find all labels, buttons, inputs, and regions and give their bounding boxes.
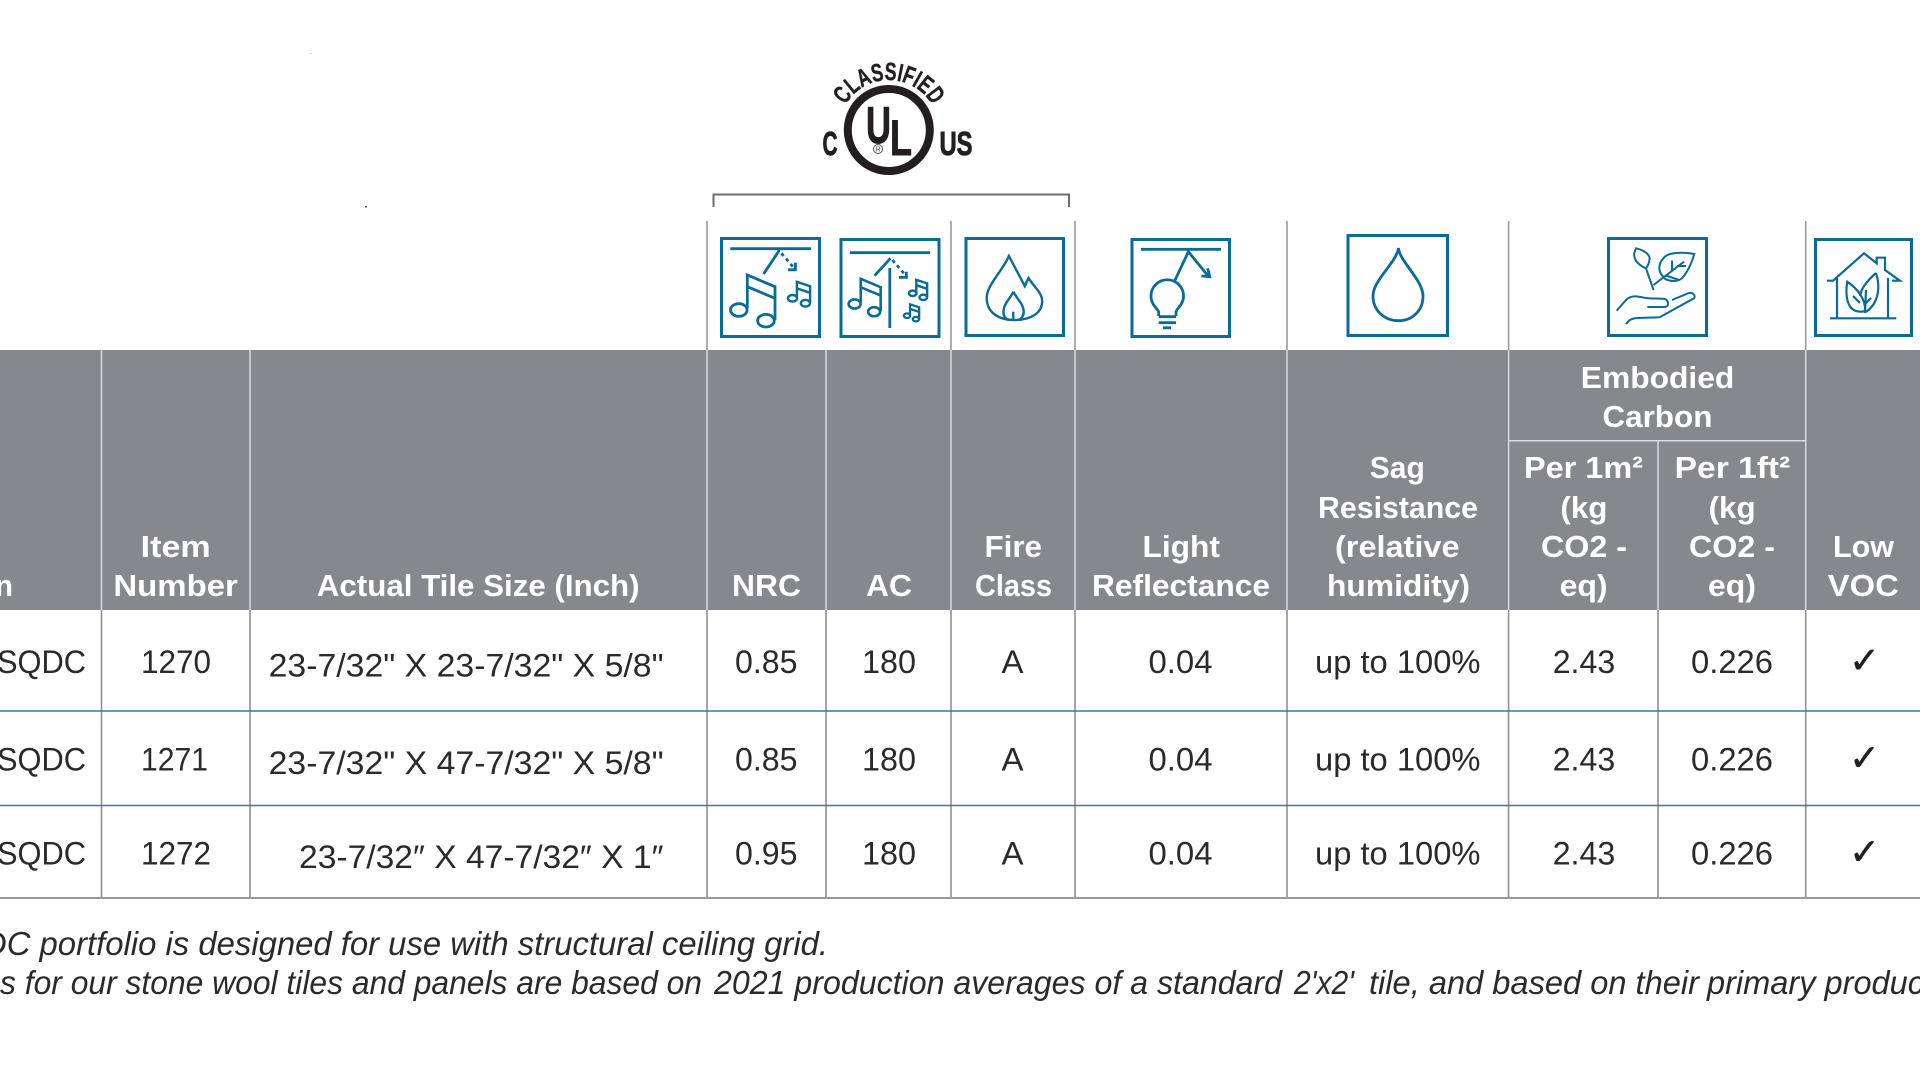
table row 1271: A (1002, 742, 1024, 778)
table header labels: CO2 - (1541, 529, 1627, 564)
table row 1271 (0, 736, 1880, 781)
certification logo: UL classified: L (890, 110, 912, 166)
table header labels: Class (975, 568, 1052, 603)
icon: low VOC house with leaves (1816, 240, 1912, 336)
footnotes (0, 925, 1920, 1001)
table header labels: Embodied (1581, 360, 1734, 395)
table header labels: Actual Tile Size (Inch) (317, 568, 640, 603)
table row 1271: 2.43 (1553, 742, 1615, 778)
table row 1271: 180 (862, 742, 916, 778)
footnotes: 2021 production averages of a standard (713, 964, 1284, 1001)
table header labels: Carbon (1602, 399, 1712, 434)
table header labels: Per 1ft² (1675, 450, 1790, 485)
table header labels: Light (1142, 529, 1220, 564)
table row 1272: 0.04 (1148, 836, 1212, 872)
table row 1270 (0, 639, 1880, 684)
table header labels: Fire (984, 529, 1042, 564)
footnotes: DC portfolio is designed for use with structural ceiling grid. (0, 925, 828, 962)
column dividers above header (707, 221, 1806, 350)
table header background (0, 350, 1920, 610)
table row 1270: ✓ (1849, 639, 1880, 682)
table header labels: Per 1m² (1524, 450, 1643, 485)
table row 1270: A (1002, 644, 1024, 680)
table row 1271: 0.04 (1148, 742, 1212, 778)
table row 1270: up to 100% (1315, 644, 1480, 680)
table row 1272: 2.43 (1553, 836, 1615, 872)
table row 1271: 23-7/32" X 47-7/32" X 5/8" (269, 745, 664, 781)
table row 1271: up to 100% (1315, 742, 1480, 778)
table header labels: AC (866, 568, 912, 603)
bracket linking UL classified columns (714, 194, 1069, 207)
table row 1270: 0.85 (735, 644, 798, 680)
table row 1270: 23-7/32" X 23-7/32" X 5/8" (269, 648, 664, 684)
certification logo: UL classified: C (822, 125, 838, 162)
table row 1272 (0, 830, 1880, 875)
table row 1271: 1271 (141, 742, 208, 778)
table row 1271: 0.226 (1691, 742, 1773, 778)
table body grid (0, 610, 1920, 898)
certification logo: UL classified: CLASSIFIED (834, 62, 944, 102)
table header labels: humidity) (1327, 568, 1470, 603)
table row 1270: 0.226 (1691, 644, 1773, 680)
table header labels (0, 360, 1899, 603)
header cell dividers (102, 350, 1806, 610)
table header labels: Resistance (1318, 490, 1478, 525)
table row 1272: 1272 (141, 836, 211, 872)
footnotes: s for our stone wool tiles and panels are based on (0, 964, 702, 1001)
table header labels: (relative (1335, 529, 1460, 564)
table header labels: (kg (1560, 490, 1607, 525)
table header labels: (kg (1709, 490, 1756, 525)
certification logo: UL classified: US (940, 125, 972, 162)
table header labels: Low (1833, 529, 1895, 564)
table header labels: VOC (1828, 568, 1899, 603)
icon: noise reduction (NRC) (722, 238, 820, 336)
table row 1271: ✓ (1849, 736, 1880, 780)
icon: sound blocking (AC) (841, 240, 939, 336)
table header labels: Reflectance (1092, 568, 1270, 603)
table header labels: Item (141, 529, 211, 564)
table row 1270: 1270 (141, 644, 211, 680)
table row 1272: ✓ (1849, 830, 1880, 874)
table row 1272: A (1002, 836, 1024, 872)
footnotes: 2'x2' (1293, 964, 1356, 1001)
icon: embodied carbon plant in hand (1608, 238, 1706, 336)
certification logo: UL classified: U (866, 97, 891, 155)
table row 1270: 180 (862, 644, 916, 680)
table header labels: CO2 - (1689, 529, 1775, 564)
table row 1270: 0.04 (1148, 644, 1212, 680)
table row 1272: 0.95 (735, 836, 798, 872)
icon: fire class flame (966, 238, 1064, 336)
table header labels: eq) (1708, 568, 1756, 603)
icon: sag resistance water drop (1348, 236, 1448, 336)
table row 1270: 2.43 (1553, 644, 1615, 680)
certification logo: UL classified (822, 62, 972, 175)
footnotes: tile, and based on their (1369, 964, 1701, 1001)
table row 1272: up to 100% (1315, 836, 1480, 872)
table header labels: eq) (1560, 568, 1608, 603)
table row 1271: 0.85 (735, 742, 798, 778)
table row 1272: 180 (862, 836, 916, 872)
table row 1272: 23-7/32″ X 47-7/32″ X 1″ (299, 839, 664, 875)
icon: light reflectance bulb (1132, 240, 1230, 336)
table header labels: Sag (1370, 450, 1425, 485)
certification logo: UL classified: R (876, 146, 881, 154)
table header labels: Number (113, 568, 238, 603)
table row 1272: 0.226 (1691, 836, 1773, 872)
table header labels: NRC (732, 568, 801, 603)
